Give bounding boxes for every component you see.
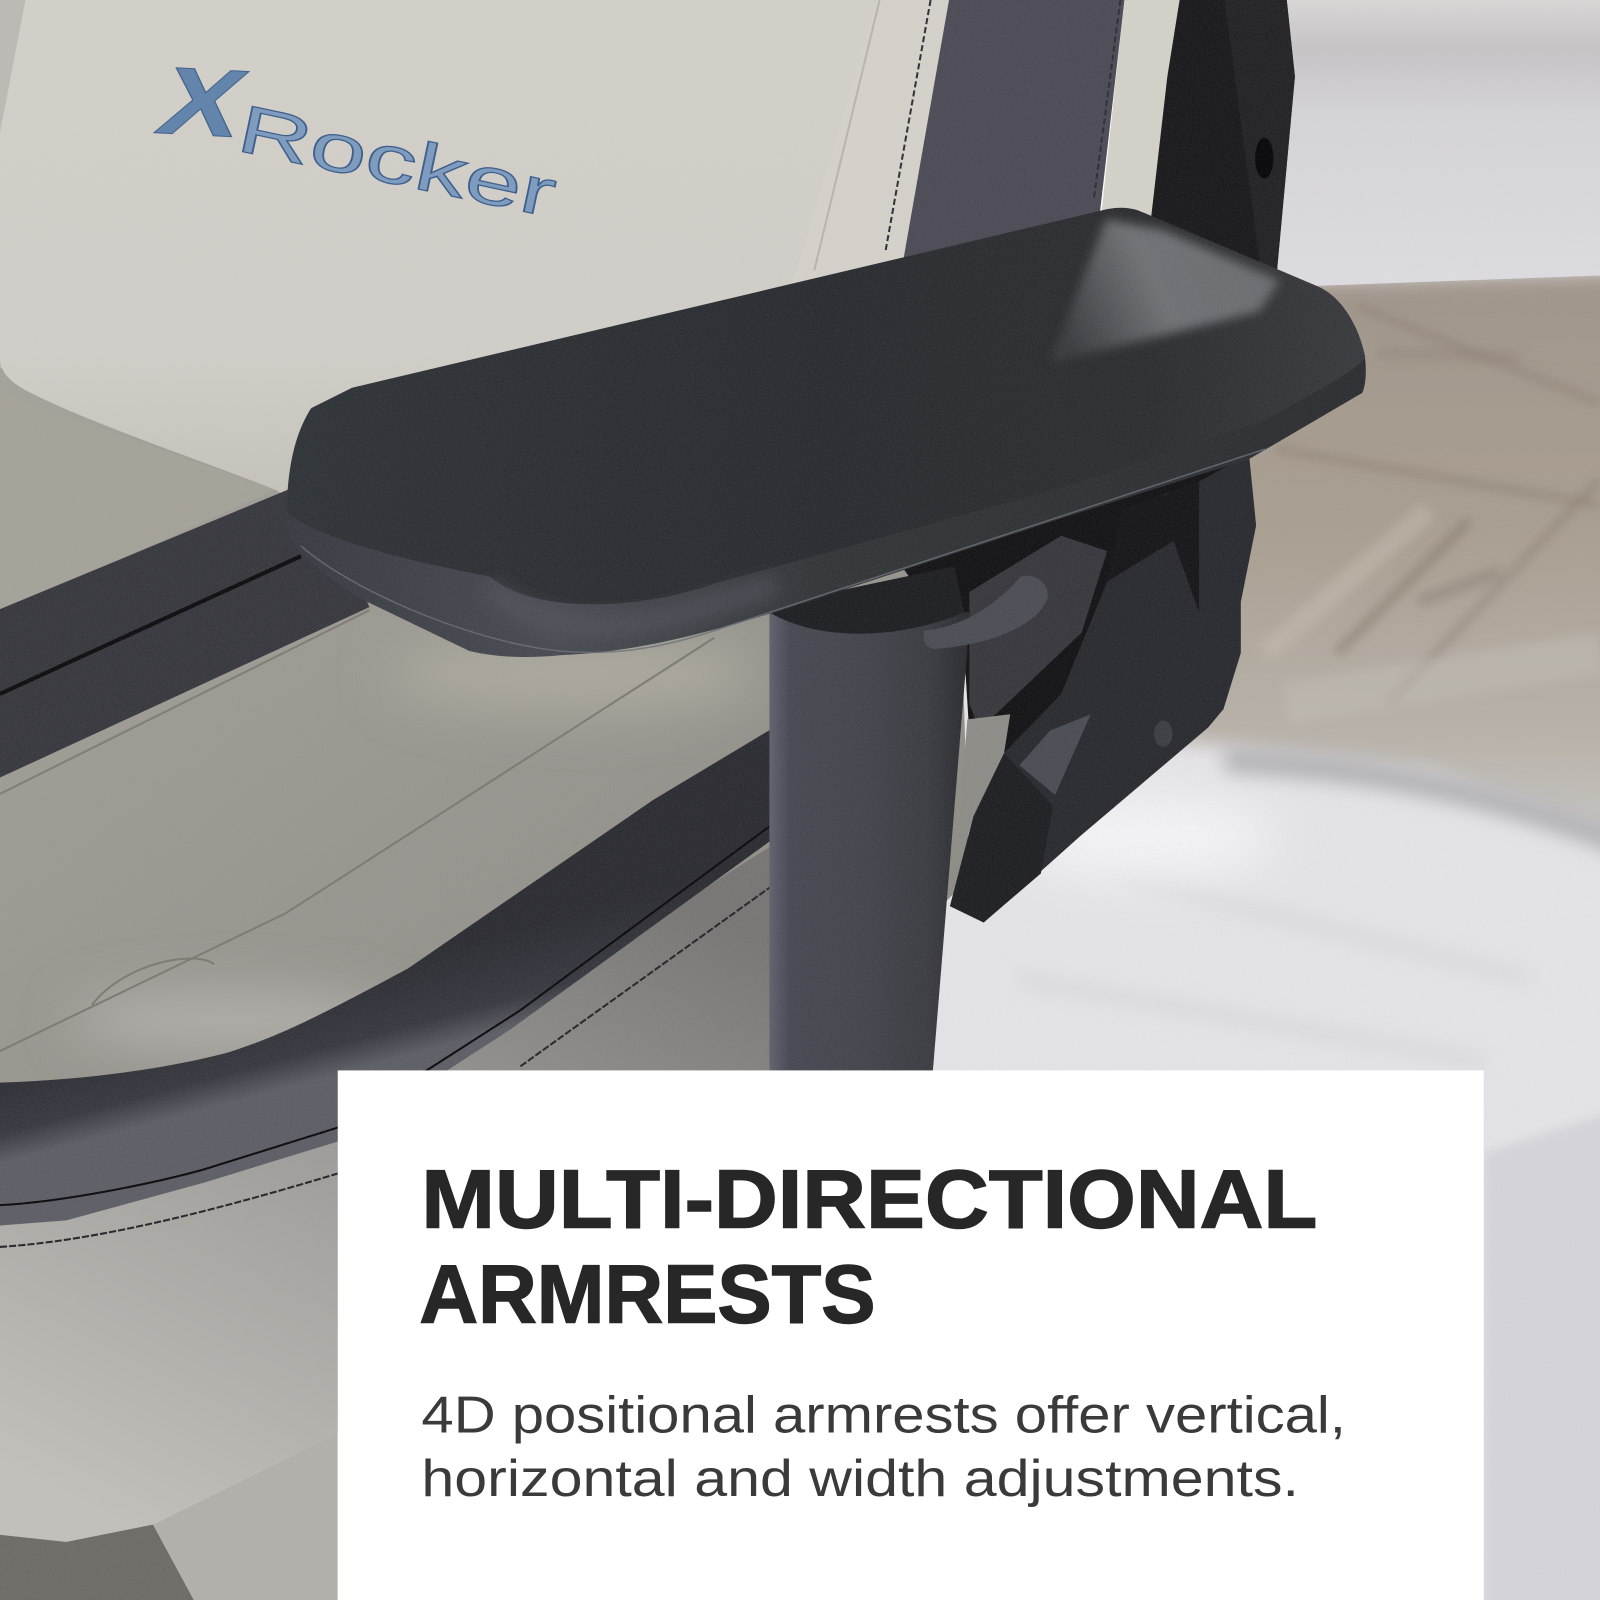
floor (918, 265, 1600, 1600)
back panel stripes (786, 0, 1182, 306)
embroidered logo: X (147, 47, 259, 157)
pad underside rim (286, 352, 1366, 657)
text panel (338, 1070, 1484, 1600)
pad highlight (1050, 219, 1280, 362)
body text (421, 1387, 1346, 1508)
mechanism bracket (950, 454, 1256, 922)
lower side fabric (0, 847, 776, 1542)
pad top surface (287, 208, 1365, 604)
embroidered logo (147, 47, 563, 232)
wall (1265, 0, 1600, 288)
adjustment lever (924, 576, 1048, 649)
back corner background (0, 0, 61, 408)
embroidered logo: Rocker (232, 91, 563, 232)
dark centre strip on seat (0, 490, 369, 794)
armrest pad (286, 208, 1366, 657)
floor beneath chair (0, 1433, 338, 1600)
body text: 4D positional armrests offer vertical, (421, 1387, 1346, 1445)
dark fabric behind mechanism (898, 449, 1255, 880)
seat stitching (0, 638, 714, 1051)
black chair frame (1148, 0, 1295, 306)
seat fabric (0, 367, 969, 1092)
headrest cushion (0, 0, 918, 510)
armrest pillar (769, 566, 970, 1073)
pad front texture highlight (490, 586, 776, 626)
heading: ARMRESTS (419, 1247, 876, 1340)
velvet dark edge band (0, 730, 770, 1247)
body text: horizontal and width adjustments. (421, 1450, 1299, 1508)
heading: MULTI-DIRECTIONAL (421, 1153, 1317, 1246)
heading (419, 1153, 1317, 1340)
